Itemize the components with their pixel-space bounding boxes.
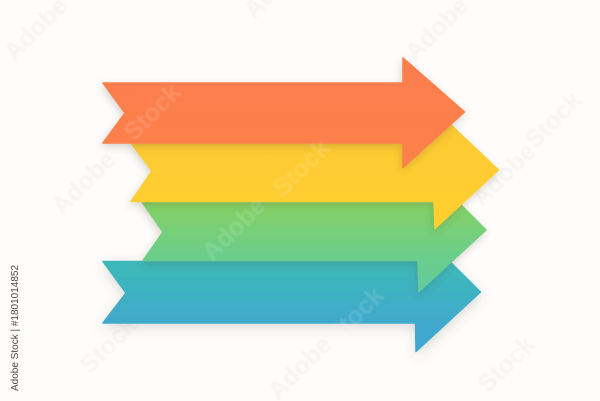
foreground watermark text: Stock: [321, 281, 389, 349]
arrow: green: [142, 189, 486, 292]
arrow: yellow: [131, 115, 498, 228]
background watermark text: Adobe: [466, 137, 541, 212]
foreground watermark text: Stock: [118, 78, 186, 146]
arrow: orange: [103, 58, 464, 168]
credit text: Adobe Stock | #1801014852: [10, 265, 21, 391]
background watermark text: Adobe: [46, 145, 121, 220]
background watermark text: Stock: [519, 86, 587, 154]
foreground watermark text: Adobe: [196, 191, 271, 266]
foreground watermark text: Stock: [267, 134, 335, 202]
background watermark text: Stock: [74, 311, 142, 379]
background watermark text: Stock: [472, 330, 540, 398]
foreground watermark text: [118, 78, 389, 349]
arrow: blue: [103, 247, 480, 352]
